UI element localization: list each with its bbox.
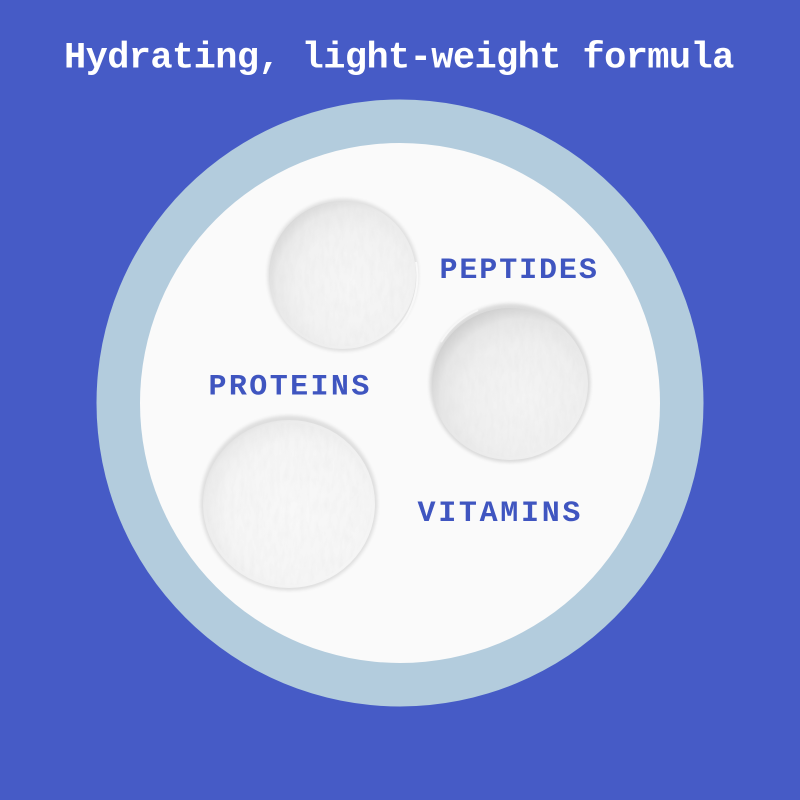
icon: serum drop right (430, 304, 590, 465)
panel: inner white circle (140, 143, 660, 663)
panel: outer ring (96, 100, 704, 706)
label: peptides: PEPTIDES (440, 254, 599, 288)
icon: serum drop top (265, 198, 420, 353)
title: Hydrating, light-weight formula (64, 38, 734, 80)
label: vitamins: VITAMINS (418, 497, 583, 531)
label: proteins: PROTEINS (208, 370, 372, 404)
icon: serum drop bottom (200, 415, 378, 593)
